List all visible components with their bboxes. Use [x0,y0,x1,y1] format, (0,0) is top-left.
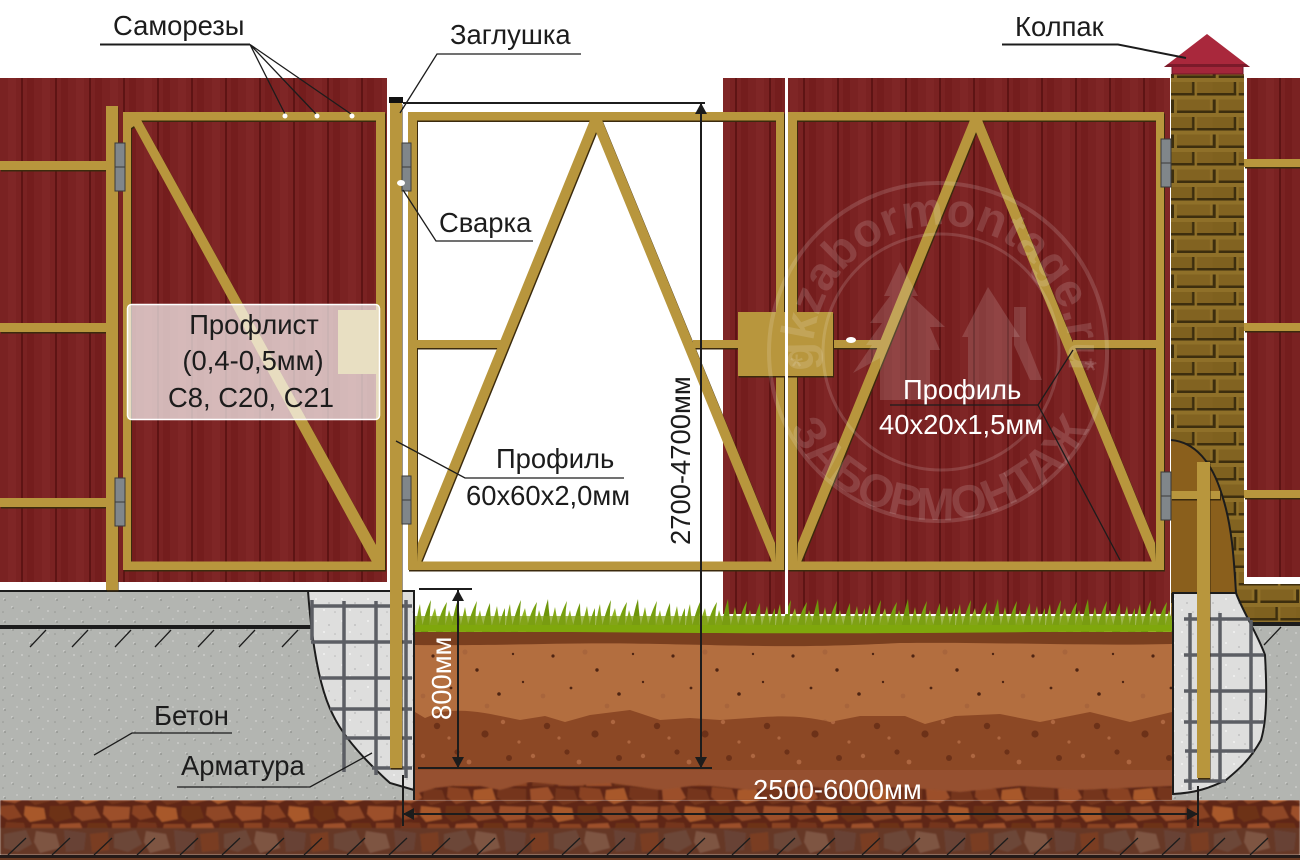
white gap between leaves [785,78,788,614]
label: cap: Колпак [1015,11,1105,42]
watermark stamp: gkzabormontage.ru [780,200,1094,369]
far-right fence rails [1171,159,1300,499]
label: profile 60x60 [396,441,630,511]
far-left fence rails [0,161,107,507]
label: concrete [94,700,232,755]
right foundation [1171,440,1300,800]
label: weld: Сварка [439,207,532,238]
grass [415,598,1172,633]
callout: profile sheet: Профлист [189,309,319,340]
dimension: depth: 800мм [426,637,457,720]
watermark stamp: * [1084,352,1097,390]
label: weld [397,180,533,241]
watermark stamp [767,181,1109,523]
left wicket frame [123,112,385,570]
gate frame right leaf [788,112,1164,570]
watermark stamp: ЗАБОРМОНТАЖ [794,412,1090,520]
left post [106,106,118,590]
rubble base [0,800,1300,860]
rebar mesh left [311,600,412,778]
icon: pillar cap [1164,34,1250,74]
right post in foundation [1197,462,1210,778]
label: cap [1002,11,1186,58]
panel: corrugated sheet left [0,78,387,582]
label: profile 40x20: Профиль [903,374,1021,405]
hinges [115,139,1171,526]
callout: profile sheet [128,304,380,420]
label: rebar [177,750,372,787]
label: self-tapping screws [100,10,354,118]
dimension: gate height: 2700-4700мм [665,376,696,545]
callout: profile sheet: С8, С20, С21 [168,382,334,413]
panel: corrugated sheet centre-right [723,78,1170,614]
label: plug [400,19,581,113]
label: rebar: Арматура [181,750,305,781]
label: profile 60x60: Профиль [496,443,614,474]
lock plate [738,312,833,376]
dimension: gate width: 2500-6000мм [753,774,922,805]
soil strata [415,630,1172,800]
label: concrete: Бетон [154,700,229,731]
panel: corrugated sheet far right [1247,78,1300,577]
central post with plug [389,97,403,768]
label: profile 60x60: 60х60х2,0мм [466,480,630,511]
label: profile 40x20 [879,350,1120,560]
watermark stamp: * [790,348,803,386]
label: plug: Заглушка [450,19,571,50]
gate frame left leaf [408,112,784,570]
weld point at lock [846,337,856,343]
label: self-tapping screws: Саморезы [113,10,244,41]
brick pillar and wall base [1171,74,1300,624]
concrete left with foundation [0,590,414,800]
rebar mesh right [1184,613,1265,790]
callout: profile sheet: (0,4-0,5мм) [182,345,324,376]
label: profile 40x20: 40х20х1,5мм [879,409,1043,440]
